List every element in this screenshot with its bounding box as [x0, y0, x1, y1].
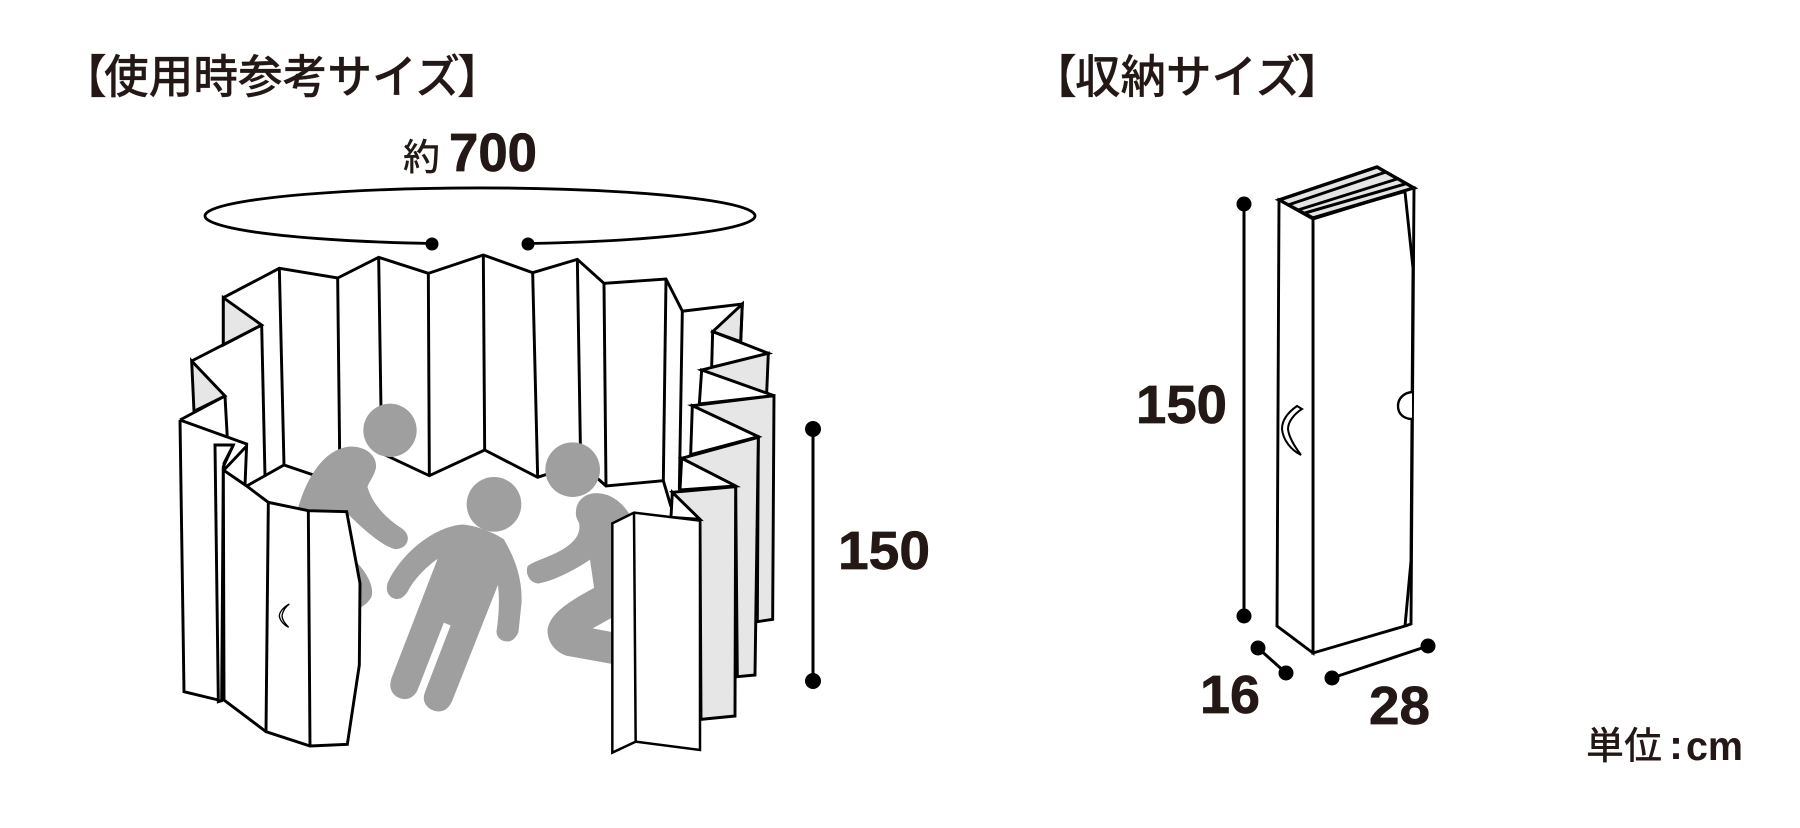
heading: storage size: 【: [1031, 51, 1077, 103]
unit note: :: [1669, 721, 1683, 768]
person 1: [298, 404, 417, 607]
dimension label: circumference about 700: [403, 123, 537, 183]
heading: storage size: 】: [1297, 51, 1343, 103]
dimension label: circumference about 700: 700: [449, 123, 537, 183]
dimension: depth 16: [1250, 640, 1294, 680]
number: 150 stored: 150: [1136, 375, 1227, 435]
dimension: circumference ellipse: [205, 188, 755, 250]
number: 28: 28: [1369, 676, 1430, 736]
heading: usage size: 【: [61, 51, 107, 103]
dimension: height 150 (stored): [1236, 196, 1252, 624]
right folded panel stack: [671, 304, 774, 719]
person 2: [388, 477, 521, 711]
illustration: folding partition in use with three people: [180, 255, 774, 753]
left folded panels: [192, 298, 265, 477]
illustration: stored partition box: [1277, 167, 1414, 653]
front left panels: [180, 396, 360, 746]
person 3: [528, 442, 630, 665]
heading: storage size: 収納サイズ: [1075, 51, 1301, 103]
back wall panels: [223, 255, 684, 507]
number: 150 usage: 150: [838, 521, 930, 581]
front right panel: [612, 513, 700, 753]
dimension: width 28: [1324, 638, 1436, 686]
number: 16: 16: [1200, 665, 1260, 725]
heading: usage size: 使用時参考サイズ: [104, 51, 460, 103]
unit note: [1586, 721, 1743, 769]
dimension label: circumference about 700: 約: [403, 137, 440, 178]
unit note: 単位: [1586, 726, 1662, 768]
dimension: height 150 (usage): [805, 421, 821, 689]
heading: usage size: 】: [457, 51, 503, 103]
unit note: cm: [1686, 723, 1743, 769]
